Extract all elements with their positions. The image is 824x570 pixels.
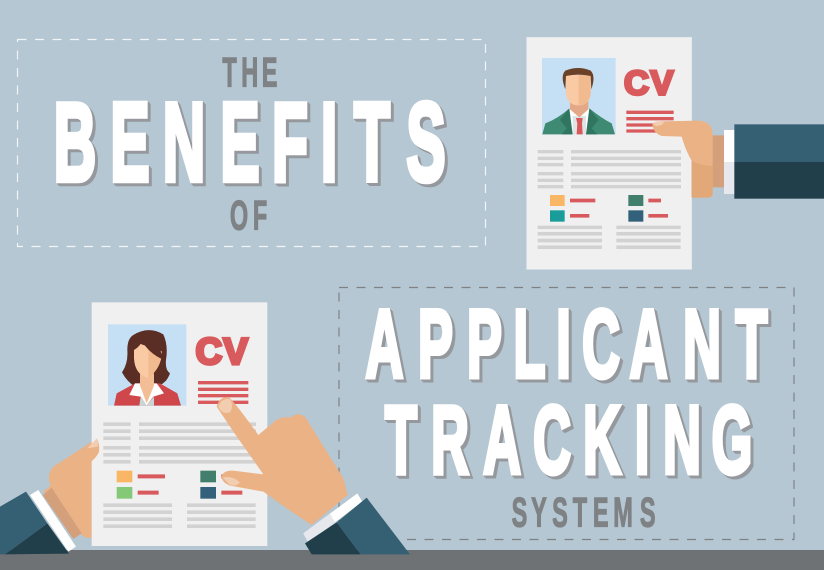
heading: OF: OF [230,192,267,239]
left hand thumb [80,438,99,468]
left hand palm [43,438,99,538]
CV wordmark: CV [624,64,673,102]
photo: man portrait [542,58,616,134]
CV wordmark: CV [196,331,248,372]
shirt cuff [724,130,735,194]
jacket sleeve [734,124,824,199]
grey text lines [538,150,681,249]
colour swatches and bars [117,471,242,499]
right jacket sleeve [305,498,410,554]
dashed frame: bottom title [339,288,794,540]
left shirt cuff [30,490,76,552]
red heading lines [626,111,674,133]
panel: man's CV held by a hand [527,37,824,269]
dashed frame: top title [18,40,486,246]
heading: TRACKING: TRACKING [385,385,752,494]
heading: THE: THE [222,49,277,96]
heading: APPLICANT: APPLICANT [366,289,768,398]
floor band [0,550,824,570]
left jacket sleeve [0,492,69,554]
CV paper [527,37,692,269]
photo: woman portrait [108,324,186,406]
panel: woman's CV held by two hands [0,302,410,554]
colour swatches and bars [550,195,668,222]
left wrist [43,488,82,539]
red heading lines [198,381,248,404]
right shirt cuff [303,493,362,542]
heading: SYSTEMS: SYSTEMS [512,489,656,536]
CV paper [92,302,267,546]
hand holding CV [652,121,725,198]
grey text lines [103,422,256,528]
right hand pointing [217,397,348,525]
heading: BENEFITS: BENEFITS [54,81,446,204]
